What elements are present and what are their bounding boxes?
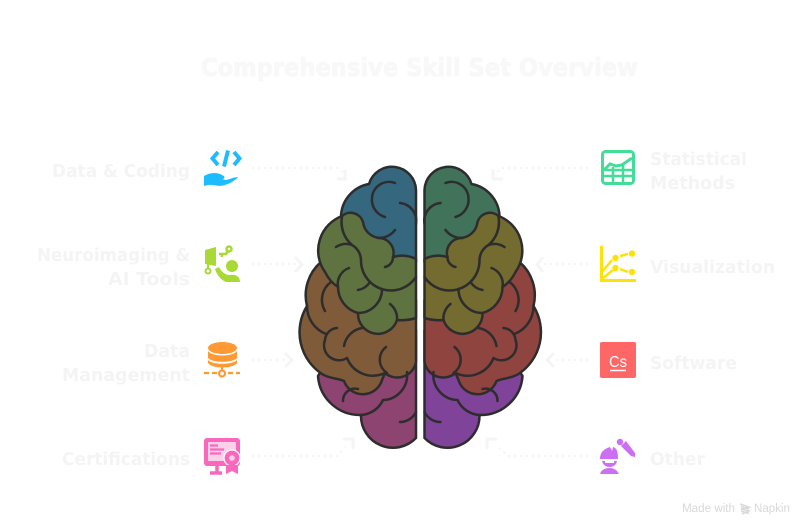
label: Visualization: Visualization [650, 257, 775, 278]
icon: certificate [204, 438, 240, 474]
title: Comprehensive Skill Set Overview [201, 53, 638, 82]
label: Neuroimaging & AI Tools: AI Tools [108, 269, 190, 290]
icon: Napkin logo [740, 504, 749, 514]
icon: statistics table [602, 152, 634, 184]
icon: scatter line chart [602, 246, 636, 280]
arrow: Data Management to brain [252, 353, 292, 367]
right fold lines [424, 182, 534, 422]
left lobe: brown [300, 262, 416, 394]
label: Data Management: Data [144, 341, 190, 362]
label: Software: Software [650, 353, 737, 374]
label: Data Management [62, 341, 190, 386]
icon: code on hand [204, 150, 240, 186]
right lobe: teal [424, 167, 500, 262]
arrow: brain to Software [547, 353, 588, 367]
footer: Made with Napkin [682, 503, 790, 515]
label: Data & Coding: Data & Coding [52, 161, 190, 182]
label: Statistical Methods: Statistical [650, 149, 747, 170]
label: Other: Other [650, 449, 705, 470]
left hemisphere [300, 167, 416, 448]
left fold lines [307, 182, 416, 422]
brain illustration [300, 167, 541, 448]
right lobe: olive [424, 213, 522, 334]
left lobe: green [318, 213, 416, 334]
label: Certifications: Certifications [62, 449, 190, 470]
icon: Cs software badge [600, 342, 636, 378]
arrow: Certifications to brain [252, 439, 353, 456]
icon: neuroimaging and AI [205, 246, 240, 282]
arrow: brain to Visualization [537, 257, 588, 272]
left lobe: purple-pink [318, 330, 416, 448]
arrow: Data & Coding to brain [252, 168, 345, 179]
label: Neuroimaging & AI Tools: Neuroimaging & [37, 245, 190, 266]
arrow: Neuroimaging to brain [252, 257, 302, 272]
left lobe: blue [341, 167, 416, 262]
label: Neuroimaging & AI Tools [37, 245, 190, 290]
label: Statistical Methods: Methods [650, 173, 735, 194]
icon: Cs software badge: Cs [609, 354, 627, 371]
footer: Made with Napkin: Napkin [754, 503, 790, 515]
right lobe: red [424, 262, 541, 394]
icon: database [204, 342, 240, 376]
label: Data Management: Management [62, 365, 190, 386]
right lobe: purple [424, 330, 522, 448]
label: Statistical Methods [650, 149, 747, 194]
arrow: brain to Other [487, 439, 588, 456]
footer: Made with Napkin: Made with [682, 503, 735, 515]
icon: worker with pencil [600, 439, 635, 474]
arrow: Statistical Methods to brain [493, 168, 588, 179]
right hemisphere [424, 167, 541, 448]
